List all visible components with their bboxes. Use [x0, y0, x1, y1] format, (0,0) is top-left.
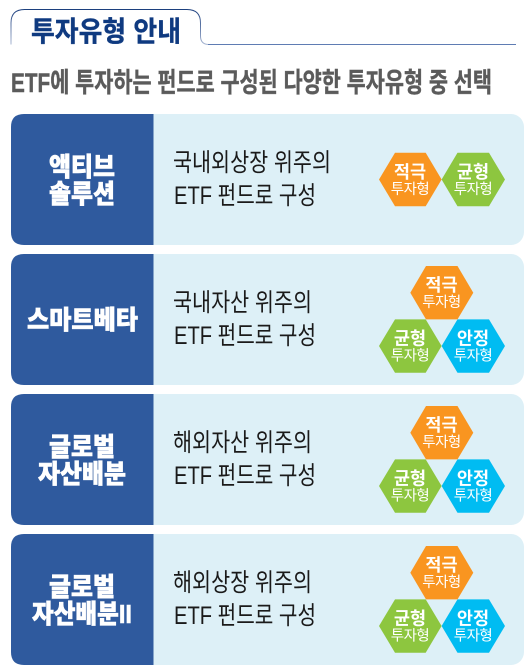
hexagon: 균형 투자형 [379, 459, 442, 513]
hexagon: 안정 투자형: 안정 [457, 468, 489, 488]
description [173, 429, 316, 490]
hexagon: 적극 투자형: 투자형 [422, 574, 461, 591]
hexagon: 균형 투자형: 균형 [394, 608, 426, 628]
hexagon: 적극 투자형: 투자형 [391, 181, 429, 198]
panel: 액티브 솔루션 [11, 114, 524, 245]
header tab [11, 10, 516, 47]
hexagon: 균형 투자형 [379, 319, 442, 373]
fund name: 자산배분II [32, 599, 132, 629]
description [173, 569, 316, 630]
hexagon: 균형 투자형: 균형 [457, 162, 489, 182]
panel: 글로벌 자산배분II [11, 534, 524, 665]
hexagon: 균형 투자형: 투자형 [391, 348, 429, 364]
fund name [32, 572, 132, 629]
panel: 스마트베타 [11, 254, 524, 385]
hexagon: 적극 투자형 [410, 546, 473, 599]
hexagon: 적극 투자형: 적극 [425, 275, 458, 295]
hexagon: 적극 투자형: 투자형 [422, 294, 461, 311]
fund name [38, 432, 126, 489]
hexagon: 적극 투자형 [410, 406, 473, 459]
hexagon: 안정 투자형: 투자형 [454, 348, 492, 364]
hexagon: 안정 투자형: 안정 [457, 608, 489, 628]
hexagon: 균형 투자형: 균형 [394, 328, 426, 348]
panel: 글로벌 자산배분 [11, 394, 524, 525]
hexagon: 균형 투자형: 균형 [394, 468, 426, 488]
fund name [49, 152, 115, 209]
hexagon: 적극 투자형 [379, 153, 442, 206]
description: 해외상장 위주의 [173, 569, 312, 597]
description: 해외자산 위주의 [173, 429, 312, 457]
hexagon: 균형 투자형: 투자형 [454, 181, 492, 198]
fund name: 솔루션 [49, 179, 115, 209]
hexagon: 안정 투자형 [442, 459, 505, 513]
fund name: 액티브 [49, 152, 115, 182]
hexagon: 적극 투자형: 적극 [425, 415, 458, 435]
hexagon: 적극 투자형 [410, 266, 473, 319]
description: ETF 펀드로 구성 [174, 322, 316, 350]
fund name: 자산배분 [38, 459, 126, 489]
description [173, 289, 316, 350]
description: ETF 펀드로 구성 [174, 182, 316, 210]
hexagon: 적극 투자형: 투자형 [422, 434, 461, 451]
description: ETF 펀드로 구성 [174, 602, 316, 630]
hexagon: 적극 투자형: 적극 [425, 555, 458, 575]
hexagon: 균형 투자형: 투자형 [391, 488, 429, 504]
hexagon: 안정 투자형 [442, 599, 505, 653]
fund name: 글로벌 [49, 572, 115, 602]
hexagon: 안정 투자형: 투자형 [454, 628, 492, 644]
hexagon: 적극 투자형: 적극 [394, 162, 426, 182]
description [173, 149, 331, 210]
fund name: 스마트베타 [27, 305, 138, 335]
description: ETF 펀드로 구성 [174, 462, 316, 490]
fund name: 글로벌 [49, 432, 115, 462]
title: 투자유형 안내 [31, 16, 181, 47]
hexagon: 균형 투자형: 투자형 [391, 628, 429, 644]
hexagon: 균형 투자형 [442, 153, 505, 206]
hexagon: 안정 투자형: 안정 [457, 328, 489, 348]
hexagon: 안정 투자형: 투자형 [454, 488, 492, 504]
hexagon: 균형 투자형 [379, 599, 442, 653]
description: 국내외상장 위주의 [173, 149, 331, 177]
description: 국내자산 위주의 [173, 289, 312, 317]
hexagon: 안정 투자형 [442, 319, 505, 373]
